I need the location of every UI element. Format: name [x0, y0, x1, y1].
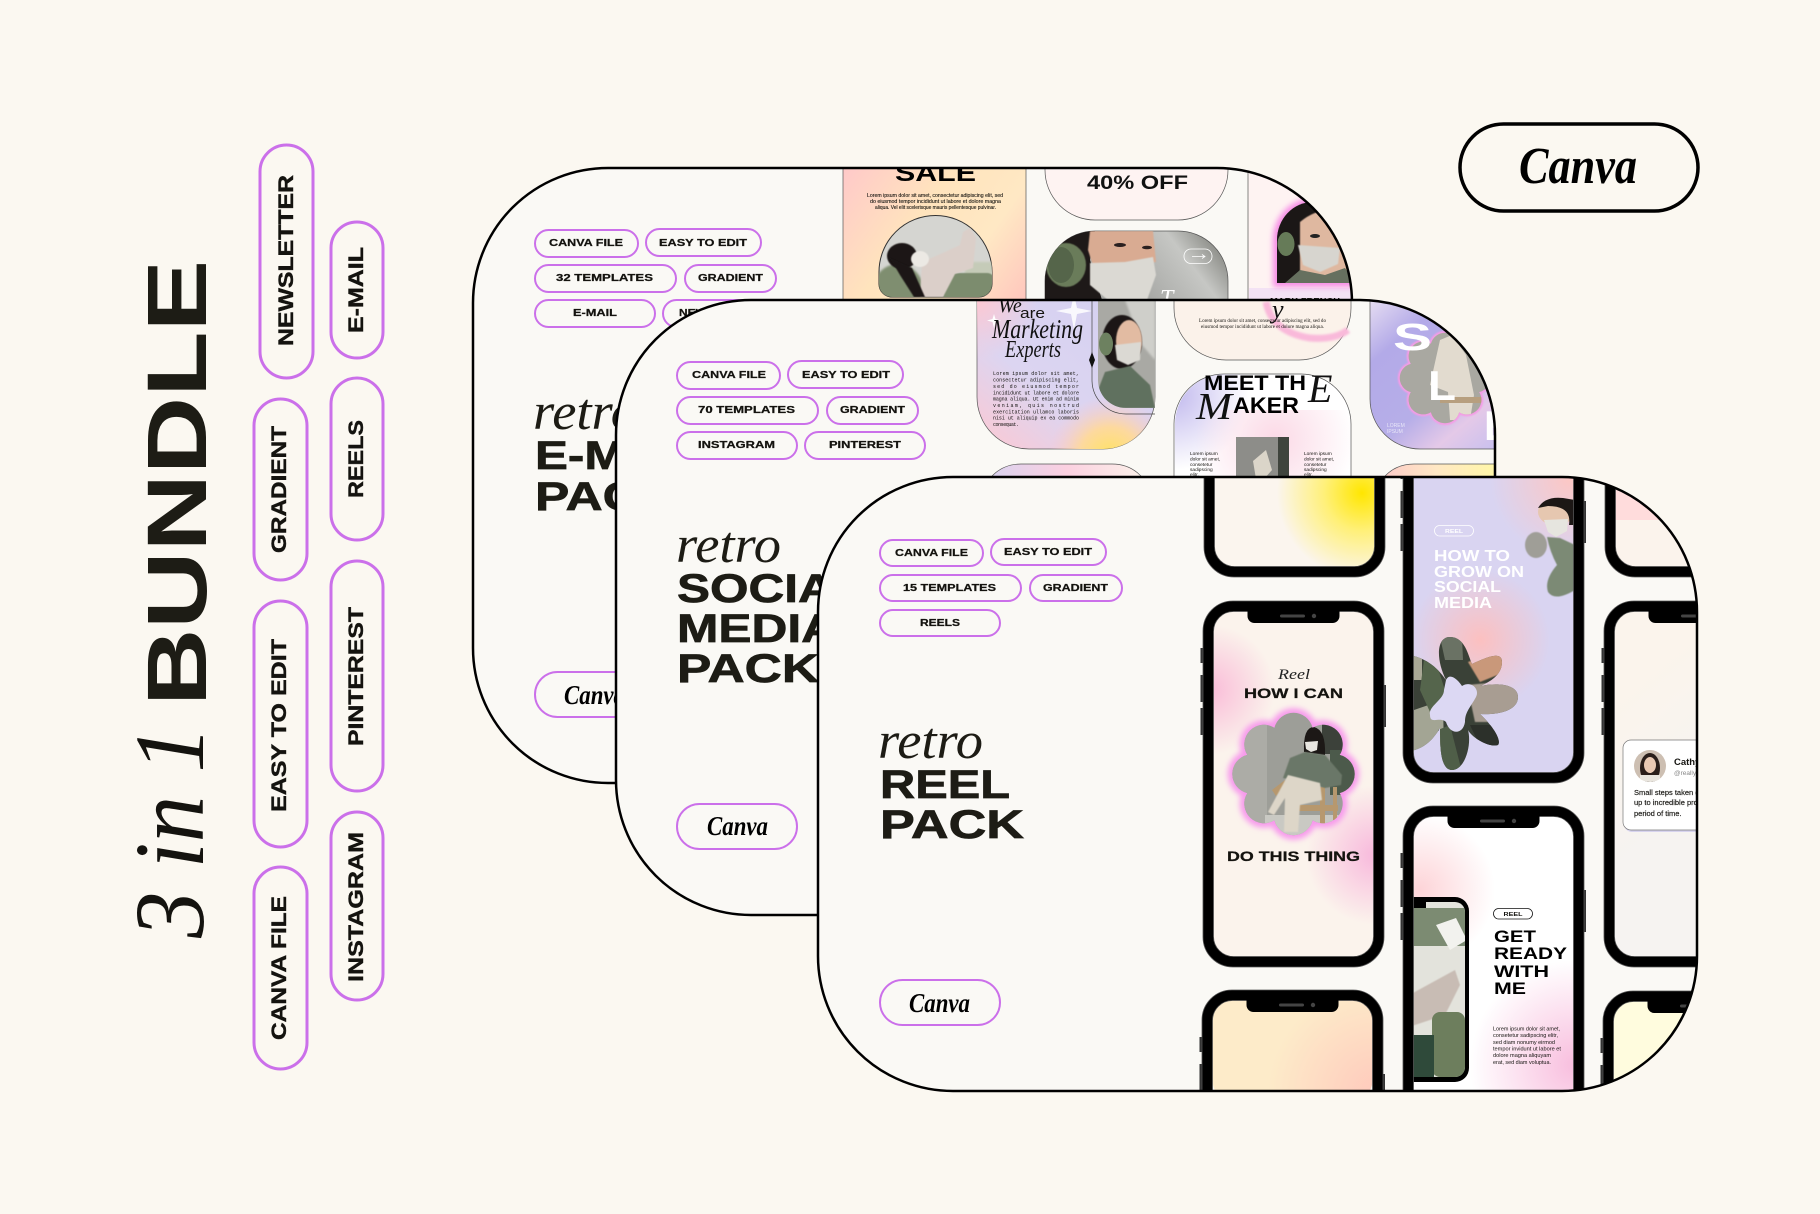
- tag pills: PINTEREST: [829, 440, 902, 451]
- tag pills: EASY TO EDIT: [1004, 547, 1093, 558]
- tag pills: [880, 539, 1122, 636]
- card: portrait with glow: [1248, 172, 1350, 299]
- pill: newsletter: NEWSLETTER: [275, 175, 298, 346]
- card: meet the maker: sadipscing: [1190, 467, 1213, 473]
- tag pills: EASY TO EDIT: [659, 238, 748, 249]
- tag pills: [677, 361, 925, 459]
- phone heading bottom: DO THIS THING: [1227, 848, 1360, 864]
- pill: gradient: [254, 399, 307, 580]
- card: sale email: [842, 169, 1026, 299]
- phone heading top: HOW I CAN: [1244, 685, 1343, 701]
- heading: BUNDLE: BUNDLE: [130, 260, 224, 706]
- phone heading: ME: [1494, 979, 1526, 998]
- panel: e-mail pack: [473, 120, 1378, 783]
- tag pills: 32 TEMPLATES: [556, 273, 653, 284]
- card: marketing experts: [976, 301, 1156, 450]
- phone heading: HOW TO: [1434, 548, 1510, 565]
- paragraph: sed diam nonumy eirmod: [1493, 1040, 1555, 1046]
- card: slide with flower photo: S: [1393, 317, 1432, 359]
- tag pills: GRADIENT: [1043, 583, 1109, 594]
- testimonial card: @reallygreatsite: [1674, 770, 1721, 777]
- pill: e-mail: E-MAIL: [345, 247, 368, 333]
- pill: newsletter: [260, 145, 313, 378]
- tag pills: CANVA FILE: [895, 548, 968, 559]
- card: 40% off: [1044, 169, 1228, 220]
- testimonial card: Small steps taken can lead: [1634, 788, 1724, 797]
- phone: how i can do this thing: [1200, 601, 1386, 967]
- card: slide with flower photo: IPSUM: [1387, 429, 1403, 435]
- flower photo: [1225, 705, 1365, 845]
- tag pills: GRADIENT: [840, 405, 906, 416]
- pill: canva file: CANVA FILE: [268, 896, 291, 1040]
- panel: social media pack: [614, 298, 1496, 916]
- card: meet the maker: sadipscing: [1304, 467, 1327, 473]
- pill: canva file: [254, 867, 307, 1069]
- photo: woman on sofa: [878, 215, 992, 298]
- pack title: MEDIA: [677, 607, 837, 651]
- card: marketing experts: Marketing: [991, 314, 1083, 344]
- pack title: E-MAIL: [535, 434, 705, 478]
- tag pills: CANVA FILE: [549, 238, 623, 249]
- card: portrait with glow: MARK FRENCH: [1270, 297, 1340, 306]
- pack title: retro: [676, 517, 781, 574]
- photo: headphones arch: [1089, 290, 1155, 414]
- pack title: [678, 532, 822, 683]
- paragraph: [993, 371, 1079, 428]
- card: meet the maker: dolor sit amet,: [1304, 456, 1334, 462]
- pill: instagram: INSTAGRAM: [345, 832, 368, 982]
- testimonial card: [1623, 740, 1744, 832]
- flower photo: [1414, 637, 1518, 770]
- card: meet the maker: elitr.: [1190, 472, 1199, 478]
- canva pill: [534, 671, 615, 718]
- canva pill: Canva: [707, 811, 768, 841]
- tag pills: NEWSLETTER: [679, 308, 762, 319]
- card: meet the maker: AKER: [1233, 393, 1299, 418]
- phone: peach gradient: [1200, 990, 1385, 1100]
- paragraph: incididunt ut labore et dolore: [993, 390, 1079, 396]
- paragraph: exercitation ullamco laboris: [993, 409, 1079, 415]
- paragraph: [1493, 1026, 1562, 1066]
- card: meet the maker: M: [1195, 386, 1235, 428]
- paragraph: Lorem ipsum dolor sit amet,: [993, 371, 1079, 377]
- pack title: [535, 400, 618, 511]
- card: meet the maker: Lorem ipsum: [1190, 451, 1218, 457]
- panel: reel pack: [816, 476, 1698, 1092]
- paragraph: erat, sed diam voluptua.: [1493, 1060, 1551, 1066]
- card: pink ring text card: eiusmod tempor incididunt ut labore et dolore magna aliqua.: [1201, 324, 1324, 330]
- inset phone photo: [1414, 897, 1469, 1082]
- pack title: PACK: [677, 647, 819, 691]
- pill: gradient: GRADIENT: [268, 426, 291, 553]
- paragraph: veniam, quis nostrud: [993, 403, 1079, 409]
- card: meet the maker: Lorem ipsum: [1304, 451, 1332, 457]
- card: meet the maker: consetetur: [1190, 462, 1213, 468]
- pill: reels: [331, 378, 383, 540]
- phone heading: [1494, 927, 1568, 998]
- pack title: retro: [878, 713, 983, 770]
- phone heading: READY: [1494, 944, 1568, 963]
- card: pink ring text card: [1174, 301, 1352, 360]
- tag pills: 15 TEMPLATES: [903, 583, 996, 594]
- vertical tag pills: [254, 145, 383, 1069]
- paragraph: Lorem ipsum dolor sit amet,: [1493, 1026, 1560, 1032]
- card: 40% off: 40% OFF: [1087, 173, 1188, 194]
- paragraph: nisi ut aliquip ex ea commodo: [993, 416, 1079, 422]
- phone: testimonial card: [1602, 601, 1787, 967]
- tag pills: CANVA FILE: [692, 370, 766, 381]
- pill: instagram: [331, 812, 383, 1000]
- script: 3 in 1: 3 in 1: [114, 726, 225, 939]
- card: lower stub right: [1384, 464, 1494, 476]
- reel tag: REEL: [1445, 529, 1463, 535]
- card: sale email: SALE: [895, 160, 976, 187]
- reel tag: [1494, 908, 1532, 919]
- phone heading: SOCIAL: [1434, 579, 1501, 596]
- card: marketing experts: are: [1020, 305, 1045, 322]
- phone: pink top block: [1602, 211, 1788, 577]
- cut-out portrait: [1525, 498, 1575, 597]
- testimonial card: period of time.: [1634, 809, 1682, 818]
- pack title: retro: [533, 384, 638, 441]
- card: headphones photo: T: [1160, 286, 1175, 312]
- title: 3 in 1 bundle: [114, 260, 225, 939]
- canva logo badge: Canva: [1519, 138, 1637, 195]
- pill: pinterest: PINTEREST: [345, 607, 368, 746]
- canva pill: Canva: [909, 988, 970, 1018]
- card: sale email: aliqua. Vel elit scelerisque mauris pellentesque pulvinar.: [875, 205, 996, 211]
- canva logo badge: [1460, 124, 1698, 211]
- paragraph: tempor invidunt ut labore et: [1493, 1046, 1562, 1052]
- pack title: SOCIAL: [677, 567, 864, 611]
- pack title: PACK: [535, 475, 677, 519]
- card: marketing experts: Experts: [1004, 337, 1061, 363]
- card: slide with flower photo: L: [1428, 362, 1456, 409]
- tag pills: [535, 229, 783, 327]
- paragraph: sed do eiusmod tempor: [993, 384, 1079, 390]
- phone heading: GROW ON: [1434, 564, 1524, 581]
- card: meet the maker: dolor sit amet,: [1190, 456, 1220, 462]
- card: meet the maker: elitr.: [1304, 472, 1313, 478]
- pill: reels: REELS: [345, 420, 368, 498]
- tag pills: REELS: [920, 618, 960, 629]
- pill: pinterest: [331, 561, 383, 791]
- reel tag: REEL: [1504, 912, 1522, 918]
- tag pills: 70 TEMPLATES: [698, 405, 795, 416]
- card: slide with flower photo: [1370, 302, 1494, 450]
- canva pill: Canva: [564, 680, 625, 710]
- paragraph: dolore magna aliquyam: [1493, 1053, 1551, 1059]
- phone: how to grow on social media: [1400, 478, 1586, 784]
- paragraph: consetetur sadipscing elitr,: [1493, 1033, 1558, 1039]
- card: slide with flower photo: E: [1484, 402, 1512, 449]
- tag pills: EASY TO EDIT: [802, 370, 891, 381]
- tag pills: E-MAIL: [573, 308, 617, 319]
- card: meet the maker: E: [1307, 366, 1332, 411]
- reel tag: [1434, 526, 1474, 536]
- pack title: PACK: [880, 803, 1024, 847]
- card: sale email: Lorem ipsum dolor sit amet, consectetur adipiscing elit, sed: [867, 193, 1003, 199]
- pill: easy to edit: [254, 601, 307, 847]
- card: slide with flower photo: LOREM: [1387, 423, 1405, 429]
- phone: yellow gradient: [1204, 478, 1386, 578]
- phone heading: MEDIA: [1434, 595, 1492, 612]
- card: pink ring text card: Lorem ipsum dolor sit amet, consectetur adipiscing elit, sed do: [1199, 318, 1326, 324]
- canva pill: [880, 980, 1000, 1025]
- pack title: REEL: [880, 763, 1010, 807]
- testimonial card: Cathy: [1674, 757, 1701, 768]
- pack title: [880, 728, 1024, 839]
- paragraph: magna aliqua. Ut enim ad minim: [993, 397, 1079, 403]
- card: meet the maker: MEET TH: [1204, 372, 1306, 395]
- canva pill: [677, 804, 797, 849]
- avatar: [1634, 750, 1666, 783]
- card: lower stub left: [992, 464, 1142, 476]
- testimonial card: up to incredible progress: [1634, 798, 1716, 807]
- phone heading: [1434, 550, 1523, 608]
- card: meet the maker: consetetur: [1304, 462, 1327, 468]
- reel script: Reel: [1277, 667, 1310, 683]
- card: meet the maker: [1174, 374, 1352, 476]
- tag pills: INSTAGRAM: [698, 440, 775, 451]
- phone: get ready with me: [1400, 806, 1586, 1090]
- paragraph: consectetur adipiscing elit,: [993, 378, 1079, 384]
- card: marketing experts: We: [998, 295, 1022, 317]
- card: headphones photo: [1044, 230, 1228, 299]
- paragraph: consequat.: [993, 422, 1019, 428]
- phone heading: WITH: [1494, 962, 1549, 981]
- tag pills: GRADIENT: [698, 273, 764, 284]
- phone: pale yellow: [1600, 991, 1786, 1102]
- phone heading: GET: [1494, 927, 1537, 946]
- card: sale email: do eiusmod tempor incididunt ut labore et dolore magna: [870, 199, 1001, 205]
- pill: e-mail: [331, 222, 383, 358]
- card: pink ring text card: y: [1269, 295, 1284, 324]
- pill: easy to edit: EASY TO EDIT: [268, 639, 291, 812]
